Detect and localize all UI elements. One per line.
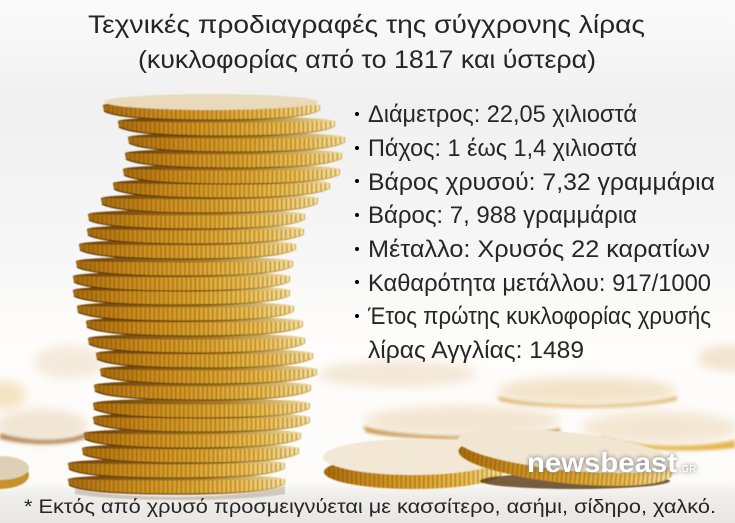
watermark: newsbeast.gr: .GR (679, 464, 697, 475)
blurred background coins (0, 345, 735, 445)
front coin: overlapping right (456, 421, 676, 494)
specifications list: Έτος πρώτης κυκλοφορίας χρυσής (367, 303, 711, 330)
blurred coin rims (0, 396, 735, 450)
title: Τεχνικές προδιαγραφές της σύγχρονης λίρας (88, 11, 645, 39)
title (88, 11, 645, 74)
title: (κυκλοφορίας από το 1817 και ύστερα) (138, 46, 596, 74)
specifications list (355, 101, 715, 364)
specifications list: Καθαρότητα μετάλλου: 917/1000 (368, 270, 711, 297)
footnote: * Εκτός από χρυσό προσμειγνύεται με κασσίτερο, ασήμι, σίδηρο, χαλκό. (24, 496, 716, 518)
icon: central stack of gold coins (68, 94, 345, 500)
small coin at left edge (0, 456, 29, 489)
watermark: newsbeast.gr: newsbeast (527, 447, 677, 478)
specifications list: Βάρος χρυσού: 7,32 γραμμάρια (368, 169, 715, 196)
specifications list: Πάχος: 1 έως 1,4 χιλιοστά (368, 135, 637, 162)
front coin: lower left (323, 439, 504, 489)
specifications list: Βάρος: 7, 988 γραμμάρια (368, 202, 637, 229)
specifications list: λίρας Αγγλίας: 1489 (368, 337, 584, 364)
specifications list: Διάμετρος: 22,05 χιλιοστά (368, 101, 637, 128)
specifications list: Μέταλλο: Χρυσός 22 καρατίων (368, 236, 710, 263)
